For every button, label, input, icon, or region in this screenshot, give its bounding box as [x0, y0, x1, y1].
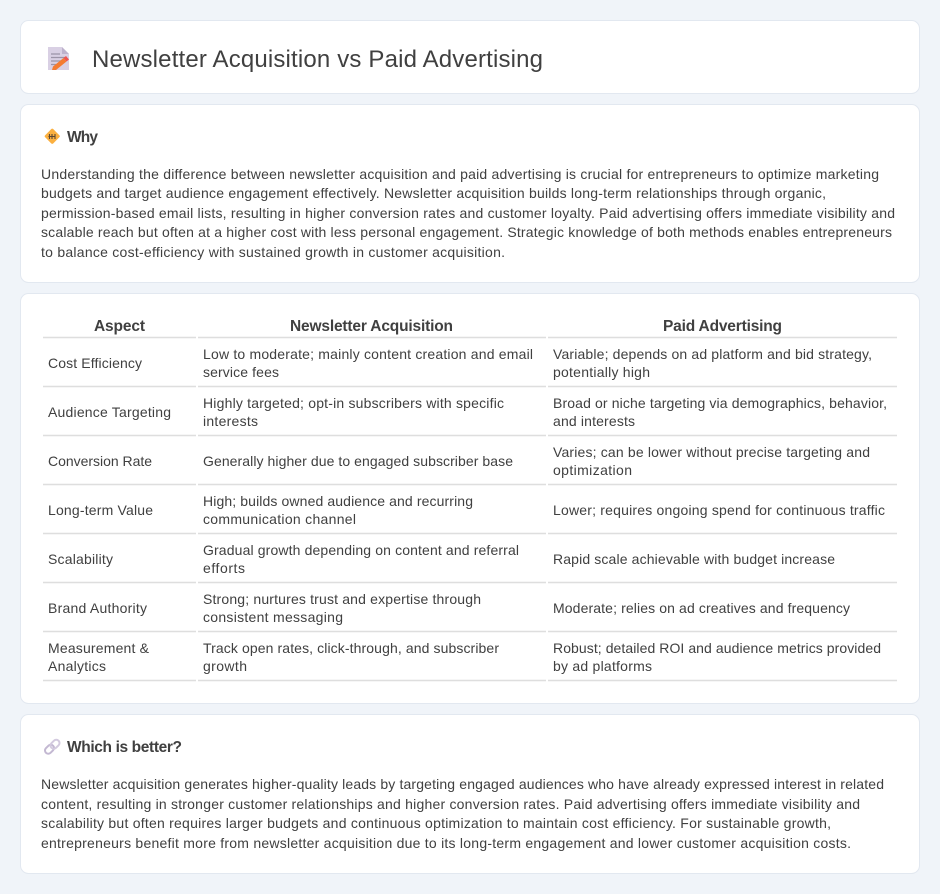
- row: long-term value: Lower; requires ongoing spend for continuous traffic: [553, 502, 885, 518]
- row: conversion rate: Conversion Rate: [48, 453, 152, 469]
- panel: comparison table: [20, 294, 920, 704]
- row: audience targeting: Highly targeted; opt-in subscribers with specific: [203, 395, 504, 411]
- row: audience targeting: and interests: [553, 413, 635, 429]
- row: long-term value: [48, 493, 885, 527]
- icon: warning diamond: [44, 128, 60, 144]
- row: measurement and analytics: [48, 640, 881, 674]
- row: long-term value: High; builds owned audience and recurring: [203, 493, 473, 509]
- heading: which is better: Which is better?: [67, 739, 182, 756]
- row: audience targeting: interests: [203, 413, 258, 429]
- text block: why paragraph: permission-based email lists, resulting in higher conversion rates and customer loyalty. Paid advertising offers immediate visibility and: [41, 205, 895, 221]
- row: cost efficiency: potentially high: [553, 364, 650, 380]
- row: scalability: Rapid scale achievable with budget increase: [553, 551, 835, 567]
- table header row: Aspect: [94, 318, 145, 335]
- row: brand authority: [48, 591, 850, 625]
- text block: why paragraph: to balance cost-efficiency with sustained growth in customer acquisition.: [41, 244, 505, 260]
- text block: which is better paragraph: entrepreneurs benefit more from newsletter acquisition due to its long-term engagement and lower customer acquisition costs.: [41, 835, 851, 851]
- row: brand authority: Brand Authority: [48, 600, 147, 616]
- row: long-term value: communication channel: [203, 511, 356, 527]
- row: scalability: Scalability: [48, 551, 113, 567]
- title: Newsletter Acquisition vs Paid Advertising: [92, 46, 543, 73]
- panel: which is better: [20, 714, 920, 874]
- text block: which is better paragraph: scalability but often requires larger budgets and continuous optimization to maintain cost efficiency. For sustainable growth,: [41, 815, 831, 831]
- row: cost efficiency: Variable; depends on ad platform and bid strategy,: [553, 346, 872, 362]
- row: measurement and analytics: Analytics: [48, 658, 106, 674]
- text block: why paragraph: Understanding the difference between newsletter acquisition and paid advertising is crucial for entrepreneurs to optimize marketing: [41, 166, 879, 182]
- text block: why paragraph: [41, 166, 895, 260]
- heading: why: Why: [67, 129, 98, 146]
- table header row: Newsletter Acquisition: [290, 318, 453, 335]
- row: scalability: Gradual growth depending on content and referral: [203, 542, 519, 558]
- row: audience targeting: [48, 395, 887, 429]
- row: cost efficiency: Cost Efficiency: [48, 355, 142, 371]
- row: measurement and analytics: by ad platforms: [553, 658, 652, 674]
- row: cost efficiency: [48, 346, 872, 380]
- text block: why paragraph: budgets and target audience engagement effectively. Newsletter acquisition builds long-term relationships through organic,: [41, 185, 826, 201]
- icon: chain link: [44, 738, 61, 755]
- icon: memo with pencil: [48, 47, 69, 70]
- row: scalability: [48, 542, 835, 576]
- row: cost efficiency: service fees: [203, 364, 279, 380]
- text block: which is better paragraph: Newsletter acquisition generates higher-quality leads by targeting engaged audiences who have already expressed interest in related: [41, 776, 884, 792]
- text block: which is better paragraph: content, resulting in stronger customer relationships and higher conversion rates. Paid advertising offers immediate visibility and: [41, 796, 860, 812]
- row: long-term value: Long-term Value: [48, 502, 153, 518]
- row: brand authority: Strong; nurtures trust and expertise through: [203, 591, 481, 607]
- row: measurement and analytics: growth: [203, 658, 247, 674]
- row: conversion rate: Varies; can be lower without precise targeting and: [553, 444, 870, 460]
- row: measurement and analytics: Track open rates, click-through, and subscriber: [203, 640, 499, 656]
- row: scalability: efforts: [203, 560, 245, 576]
- panel: why: [20, 104, 920, 282]
- row: audience targeting: Audience Targeting: [48, 404, 171, 420]
- text block: why paragraph: scalable reach but often at a higher cost with less personal engagement. Strategic knowledge of both methods enables entrepreneurs: [41, 224, 892, 240]
- row: cost efficiency: Low to moderate; mainly content creation and email: [203, 346, 533, 362]
- row: audience targeting: Broad or niche targeting via demographics, behavior,: [553, 395, 887, 411]
- panel: title header: [20, 20, 920, 94]
- table header row: Paid Advertising: [663, 318, 782, 335]
- row: conversion rate: Generally higher due to engaged subscriber base: [203, 453, 513, 469]
- row: brand authority: consistent messaging: [203, 609, 343, 625]
- row: conversion rate: [48, 444, 870, 478]
- row: measurement and analytics: Robust; detailed ROI and audience metrics provided: [553, 640, 881, 656]
- table header row: [94, 318, 782, 335]
- text block: which is better paragraph: [41, 776, 884, 851]
- row: conversion rate: optimization: [553, 462, 632, 478]
- row: measurement and analytics: Measurement &: [48, 640, 150, 656]
- row: brand authority: Moderate; relies on ad creatives and frequency: [553, 600, 850, 616]
